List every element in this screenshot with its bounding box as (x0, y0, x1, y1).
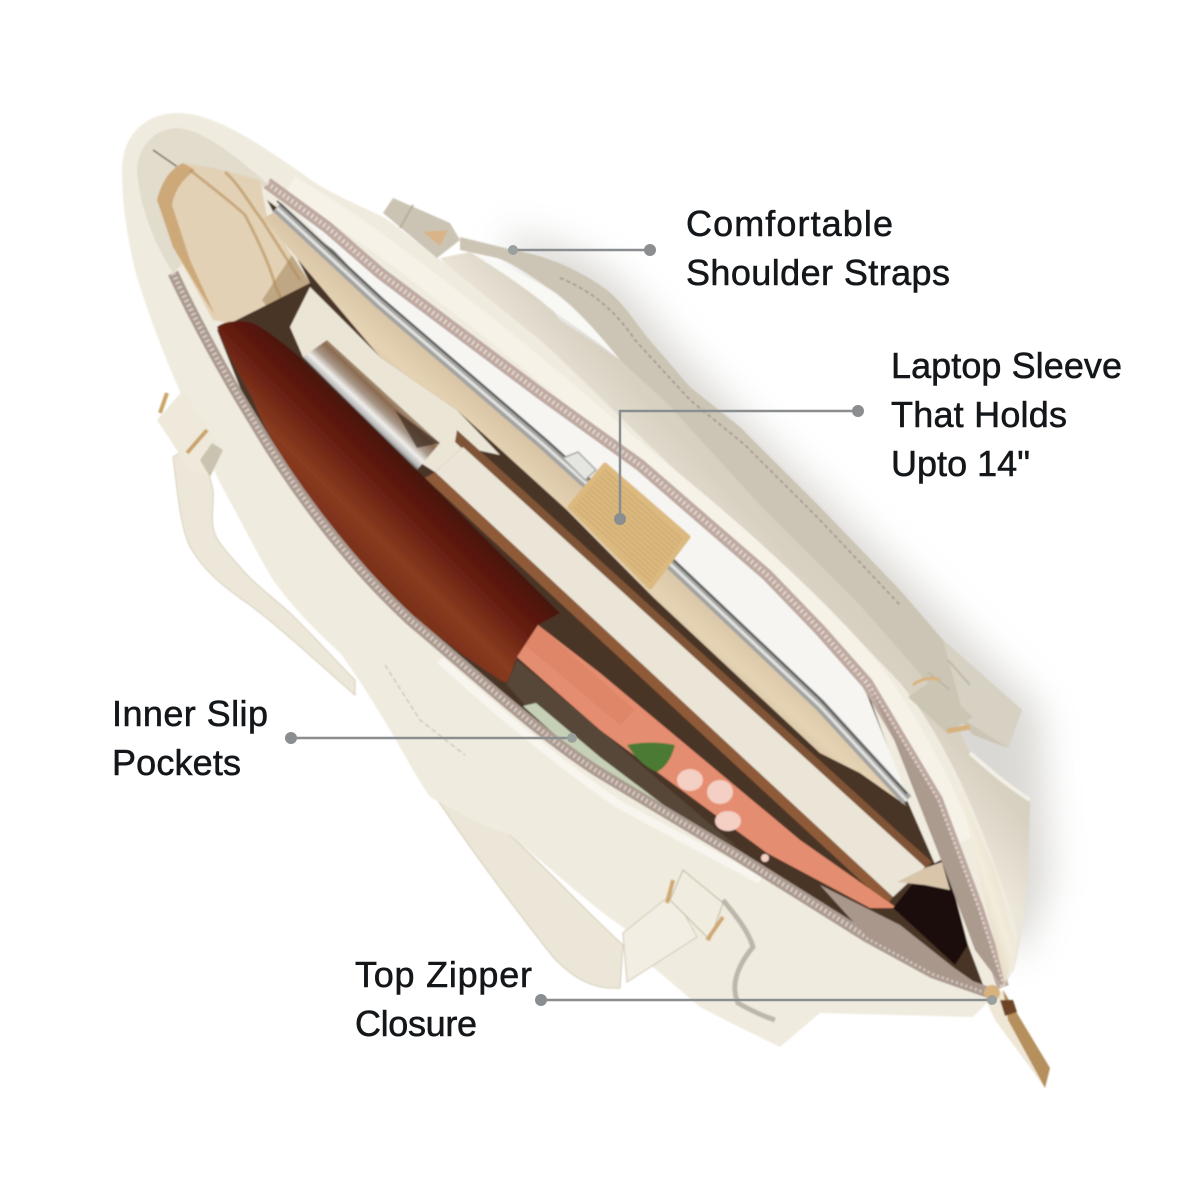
buckle, upper left (157, 390, 223, 477)
label: comfortable shoulder straps: Comfortable (686, 203, 893, 244)
side seam (153, 150, 182, 170)
buckle, lower (623, 870, 723, 982)
strap tab, right (908, 640, 1022, 748)
callout line: shoulder straps (508, 244, 656, 256)
floral print: leaf (627, 742, 675, 772)
front highlight along zipper (440, 660, 760, 880)
bag front body (122, 113, 1017, 1047)
right rim gold highlight (960, 790, 1015, 985)
zipper lining flap, left (820, 885, 990, 993)
cream book (435, 447, 925, 897)
drop shadow (500, 235, 1050, 960)
tote bag photo illustration (122, 113, 1050, 1088)
inner wall of bag end (137, 128, 267, 273)
dark bottom corner (893, 858, 968, 965)
steel water bottle (303, 340, 440, 470)
laptop charging port tab (563, 452, 596, 480)
label: top zipper closure (355, 954, 532, 1044)
label: top zipper closure: Closure (355, 1003, 477, 1044)
label: inner slip pockets: Inner Slip (112, 693, 268, 734)
label: top zipper closure: Top Zipper (355, 954, 532, 995)
dark slot below coral book (507, 660, 737, 847)
callout line: top zipper closure (535, 994, 997, 1006)
label: laptop sleeve: That Holds (891, 394, 1067, 435)
label: inner slip pockets: Pockets (112, 742, 241, 783)
back panel (440, 252, 1030, 973)
left carry strap, lower (420, 773, 623, 988)
side ring and seam (723, 900, 775, 1020)
left carry strap, upper (173, 440, 355, 695)
label: laptop sleeve: Upto 14" (891, 443, 1030, 484)
zipper pull (984, 985, 1050, 1088)
callout line: inner slip pockets (285, 732, 577, 744)
label: comfortable shoulder straps: Shoulder Straps (686, 252, 950, 293)
callout line: laptop sleeve (614, 405, 864, 525)
brown folder strip (455, 430, 932, 870)
interior fabric pocket (157, 163, 310, 333)
cream pocket behind bottle (290, 287, 500, 472)
label: laptop sleeve: Laptop Sleeve (891, 345, 1122, 386)
label: laptop sleeve (891, 345, 1122, 484)
white laptop lid (285, 200, 907, 795)
coral floral book (517, 625, 897, 908)
laptop silver edge (277, 207, 907, 800)
zipper lining flap, right (867, 683, 1003, 987)
shoulder strap (460, 237, 1030, 800)
burgundy notebook (217, 321, 560, 683)
front stitching (385, 665, 465, 755)
strap tab, top (383, 198, 460, 258)
label: comfortable shoulder straps (686, 203, 950, 293)
pale green pocket item (523, 703, 690, 825)
bag opening base (217, 200, 985, 990)
left zipper tape (173, 273, 990, 993)
tan laptop sleeve (263, 212, 907, 806)
ribbed elastic band (570, 465, 688, 587)
floral print: blossom (677, 769, 769, 862)
label: inner slip pockets (112, 693, 268, 783)
right zipper tape (267, 183, 1003, 987)
right rim highlight band (290, 185, 965, 840)
